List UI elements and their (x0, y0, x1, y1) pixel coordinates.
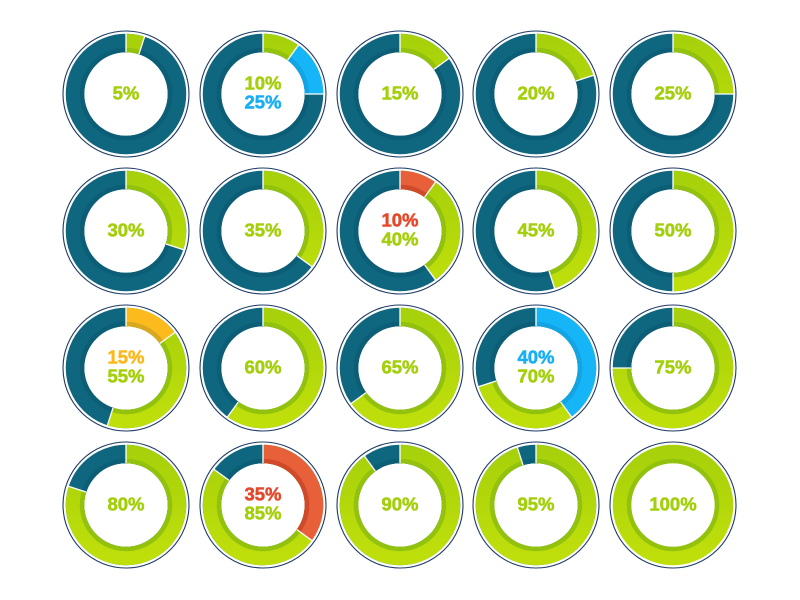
label: 65%: 65% (381, 356, 419, 378)
donut: 65% (337, 305, 463, 431)
donut: 20% (473, 31, 599, 157)
label: 60%: 60% (244, 356, 282, 378)
donut: 10% and 25% (200, 31, 326, 157)
label: 10% and 25%: 25% (244, 92, 282, 112)
label: 35% and 85%: 85% (244, 502, 282, 524)
donut: 80% (63, 442, 189, 568)
label: 20%: 20% (517, 82, 555, 104)
label: 45%: 45% (517, 220, 555, 240)
label: 15% and 55%: 15% (107, 346, 145, 368)
label: 30%: 30% (107, 220, 145, 240)
label: 15% and 55%: 55% (107, 366, 145, 386)
label: 10% and 40%: 40% (381, 228, 419, 250)
donut: 35% and 85% (200, 442, 326, 568)
donut: 30% (63, 168, 189, 294)
label: 35% and 85% (244, 484, 282, 524)
label: 15%: 15% (381, 82, 419, 104)
label: 40% and 70%: 40% (517, 346, 555, 368)
label: 15% and 55% (107, 346, 145, 386)
donut: 5% (63, 31, 189, 157)
label: 10% and 40% (381, 210, 419, 250)
label: 10% and 40%: 10% (381, 210, 419, 230)
label: 90%: 90% (381, 494, 419, 514)
label: 95%: 95% (517, 494, 555, 514)
donut: 60% (200, 305, 326, 431)
label: 75%: 75% (654, 356, 692, 378)
label: 40% and 70%: 70% (517, 366, 555, 386)
donut: 35% (200, 168, 326, 294)
donut: 45% (473, 168, 599, 294)
donut: 75% (610, 305, 736, 431)
label: 100%: 100% (649, 494, 697, 514)
donut: 15% (337, 31, 463, 157)
label: 35% and 85%: 35% (244, 484, 282, 504)
donut: 90% (337, 442, 463, 568)
donut: 15% and 55% (63, 305, 189, 431)
label: 10% and 25%: 10% (244, 72, 282, 94)
label: 40% and 70% (517, 346, 555, 386)
label: 50%: 50% (654, 220, 692, 240)
label: 5%: 5% (113, 82, 139, 104)
donut: 95% (473, 442, 599, 568)
donut: 25% (610, 31, 736, 157)
label: 25%: 25% (654, 82, 692, 104)
label: 10% and 25% (244, 72, 282, 112)
label: 80%: 80% (107, 494, 145, 514)
donut: 40% and 70% (473, 305, 599, 431)
label: 35%: 35% (244, 220, 282, 240)
donut: 100% (610, 442, 736, 568)
donut: 50% (610, 168, 736, 294)
donut: 10% and 40% (337, 168, 463, 294)
